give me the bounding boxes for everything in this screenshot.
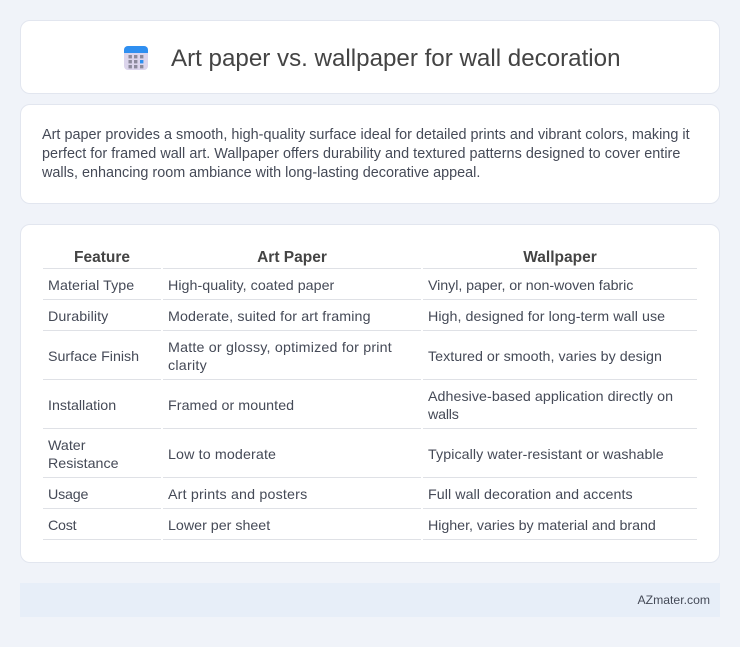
- comparison table: Resistance: [48, 456, 118, 472]
- comparison table: [43, 249, 697, 540]
- comparison table: High, designed for long-term wall use: [428, 309, 665, 325]
- comparison table: Feature: [74, 249, 130, 266]
- comparison table: Adhesive-based application directly on: [428, 389, 673, 405]
- comparison table: Material Type: [48, 278, 134, 294]
- panel: title card: [20, 20, 720, 94]
- intro text: walls, enhancing room ambiance with long-lasting decorative appeal.: [42, 165, 480, 181]
- comparison table: Higher, varies by material and brand: [428, 518, 656, 534]
- comparison table: Art Paper: [257, 249, 327, 266]
- intro text: Art paper provides a smooth, high-quality surface ideal for detailed prints and vibrant colors, making it: [42, 126, 690, 142]
- comparison table: Usage: [48, 487, 88, 503]
- comparison table: clarity: [168, 358, 207, 374]
- comparison table: Framed or mounted: [168, 398, 294, 414]
- comparison table: Water: [48, 438, 85, 454]
- comparison table: Wallpaper: [523, 249, 597, 266]
- comparison table: Moderate, suited for art framing: [168, 309, 371, 325]
- comparison table: Matte or glossy, optimized for print: [168, 340, 392, 356]
- icon: calendar: [124, 46, 148, 70]
- comparison table: Durability: [48, 309, 108, 325]
- comparison table: Vinyl, paper, or non-woven fabric: [428, 278, 633, 294]
- comparison table: Lower per sheet: [168, 518, 270, 534]
- comparison table: Textured or smooth, varies by design: [428, 349, 662, 365]
- comparison table: Full wall decoration and accents: [428, 487, 633, 503]
- panel: comparison table card: [20, 224, 720, 563]
- comparison table: Art prints and posters: [168, 487, 307, 503]
- comparison table: walls: [428, 407, 459, 423]
- footer bar: [20, 583, 720, 617]
- title: Art paper vs. wallpaper for wall decoration: [171, 45, 621, 72]
- intro text: [42, 126, 690, 181]
- comparison table: High-quality, coated paper: [168, 278, 334, 294]
- comparison table: Surface Finish: [48, 349, 139, 365]
- comparison table: Low to moderate: [168, 447, 276, 463]
- comparison table: Typically water-resistant or washable: [428, 447, 664, 463]
- comparison table: Installation: [48, 398, 116, 414]
- footer credit: AZmater.com: [638, 593, 710, 607]
- comparison table: Cost: [48, 518, 76, 534]
- intro text: perfect for framed wall art. Wallpaper offers durability and textured patterns designed to cover entire: [42, 146, 680, 162]
- panel: intro text card: [20, 104, 720, 204]
